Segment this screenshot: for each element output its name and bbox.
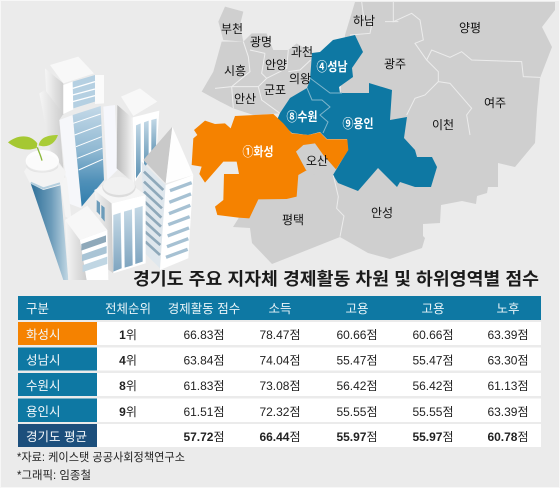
row: 화성시: 60.66점 (412, 328, 454, 342)
front low tower (65, 206, 108, 280)
row: 용인시: 55.55점 (336, 405, 378, 419)
illustration: city buildings with sprout (8, 57, 193, 280)
row: 화성시: 60.66점 (336, 328, 378, 342)
map labels: 이천 (432, 117, 454, 132)
row: 경기도 평균: 57.72점 (183, 430, 225, 444)
map labels: 시흥 (224, 64, 246, 78)
right tower (117, 88, 159, 183)
table header: 경제활동 점수 (168, 302, 240, 316)
table header: 노후 (496, 302, 520, 316)
row: 경기도 평균: 66.44점 (259, 430, 301, 444)
front middle tower (94, 177, 146, 273)
map: Gyeonggi municipalities (192, 2, 555, 264)
row: 용인시 (18, 398, 541, 422)
map labels: 여주 (484, 96, 506, 110)
map labels: 양평 (459, 21, 481, 35)
row: 용인시: 72.32점 (259, 405, 301, 419)
map labels: ⑨용인 (342, 117, 374, 131)
table header: 전체순위 (105, 302, 151, 316)
region boundaries (350, 2, 540, 135)
row: 용인시: 9위 (119, 405, 137, 419)
row: 화성시: 66.83점 (183, 328, 225, 342)
title: 경기도 주요 지자체 경제활동 차원 및 하위영역별 점수 (133, 269, 539, 289)
blue regions: Seongnam, Suwon, Yongin (277, 35, 437, 191)
row: 화성시: 1위 (119, 328, 137, 342)
round tower with plant (8, 135, 72, 280)
region: west gray cluster (202, 7, 313, 115)
row: 수원시: 61.83점 (183, 379, 225, 393)
row: 수원시: 56.42점 (336, 379, 378, 393)
map labels: 안산 (234, 92, 256, 106)
map labels: 하남 (353, 14, 375, 28)
region: east and south gray mass (233, 2, 555, 264)
table header: 소득 (268, 302, 292, 316)
map labels: 군포 (264, 83, 286, 97)
table header: 고용 (421, 302, 445, 316)
map labels: 안양 (265, 58, 287, 72)
row: 수원시: 61.13점 (487, 379, 529, 393)
row: 화성시: 63.39점 (487, 328, 529, 342)
row: 용인시: 63.39점 (487, 405, 529, 419)
row: 용인시: 55.55점 (412, 405, 454, 419)
region: Osan (296, 143, 336, 175)
back tower upper (45, 57, 104, 115)
map labels: ④성남 (316, 60, 348, 74)
table (18, 296, 541, 447)
row: 수원시: 56.42점 (412, 379, 454, 393)
row: 수원시: 73.08점 (259, 379, 301, 393)
map labels: 광주 (384, 57, 406, 71)
table header (18, 296, 541, 320)
table header: 고용 (345, 302, 369, 316)
map labels: 평택 (282, 213, 304, 227)
row: 용인시: 용인시 (26, 405, 61, 419)
row: 성남시: 성남시 (26, 354, 61, 368)
row: 성남시: 63.30점 (487, 354, 529, 368)
row: 수원시: 8위 (119, 379, 137, 393)
main tower (39, 90, 117, 208)
row: 화성시: 화성시 (26, 328, 61, 342)
row: 경기도 평균: 60.78점 (487, 430, 529, 444)
credit note: *그래픽: 임종철 (17, 469, 91, 482)
row: 경기도 평균: 55.97점 (412, 430, 454, 444)
map labels: ⑧수원 (286, 110, 318, 124)
spire tower (142, 127, 193, 270)
orange region: Hwaseong (192, 114, 348, 237)
row: 성남시 (18, 348, 541, 370)
row: 성남시: 55.47점 (412, 354, 454, 368)
row: 화성시: 78.47점 (259, 328, 301, 342)
row: 수원시 (18, 373, 541, 396)
map labels (221, 14, 506, 227)
map labels: 오산 (306, 154, 328, 168)
row: 성남시: 4위 (119, 354, 137, 368)
table header: 구분 (26, 302, 49, 316)
row: 수원시: 수원시 (26, 379, 61, 393)
row: 경기도 평균: 55.97점 (336, 430, 378, 444)
map labels: ①화성 (242, 144, 274, 159)
row: 용인시: 61.51점 (183, 405, 225, 419)
map labels: 부천 (221, 21, 243, 36)
map labels: 안성 (371, 206, 393, 220)
row: 경기도 평균 (18, 424, 541, 447)
row: 성남시: 74.04점 (259, 354, 301, 368)
row: 성남시: 55.47점 (336, 354, 378, 368)
map labels: 의왕 (289, 72, 311, 86)
map labels: 과천 (291, 44, 313, 59)
source note: *자료: 케이스탯 공공사회정책연구소 (17, 450, 185, 464)
row: 성남시: 63.84점 (183, 354, 225, 368)
map labels: 광명 (250, 35, 272, 49)
row: 화성시 (18, 322, 541, 345)
row: 경기도 평균: 경기도 평균 (26, 430, 87, 444)
